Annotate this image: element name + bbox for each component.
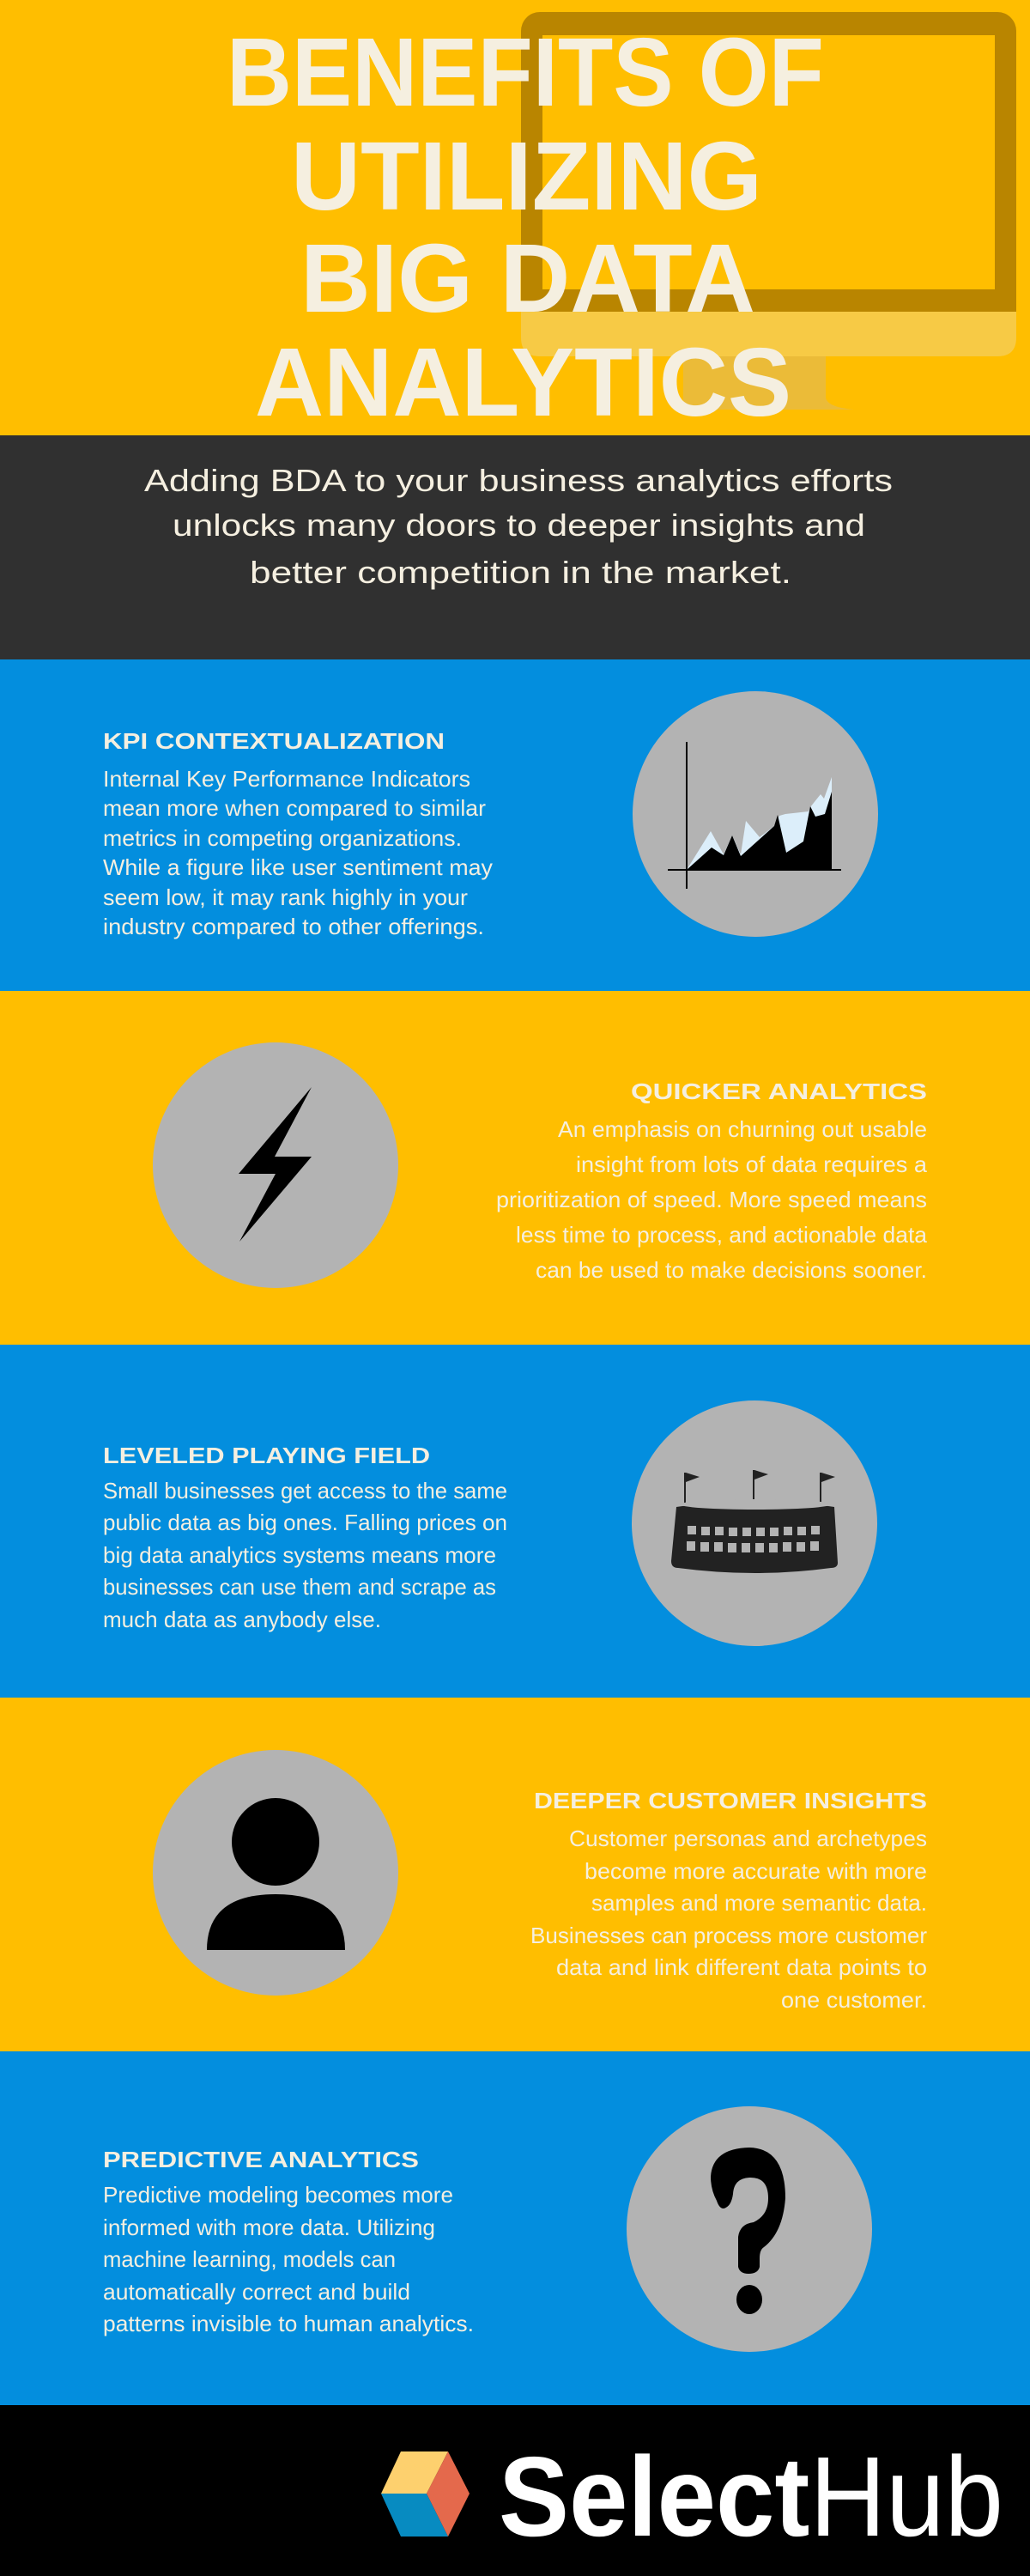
text block: KPI: While a figure like user sentiment may bbox=[103, 854, 493, 880]
panel: predictive analytics bbox=[0, 2051, 1030, 2405]
text block: KPI: industry compared to other offerings. bbox=[103, 914, 484, 939]
text block: quicker: An emphasis on churning out usable bbox=[558, 1116, 927, 1142]
heading: predictive: PREDICTIVE ANALYTICS bbox=[103, 2147, 419, 2172]
text block: quicker: less time to process, and actionable data bbox=[516, 1222, 928, 1248]
text block: quicker: can be used to make decisions sooner. bbox=[536, 1257, 927, 1283]
text block: deeper: one customer. bbox=[781, 1987, 927, 2013]
text block: leveled: big data analytics systems means more bbox=[103, 1542, 496, 1568]
text block: deeper: data and link different data points to bbox=[556, 1954, 927, 1980]
text block: KPI: seem low, it may rank highly in your bbox=[103, 884, 468, 910]
intro band bbox=[0, 435, 1030, 659]
title: UTILIZING bbox=[291, 122, 762, 230]
icon: chart bbox=[633, 691, 878, 937]
text block: quicker bbox=[496, 1116, 928, 1283]
text block: KPI: metrics in competing organizations. bbox=[103, 825, 462, 851]
footer bbox=[0, 2405, 1030, 2576]
text block: KPI: Internal Key Performance Indicators bbox=[103, 766, 470, 792]
text block: predictive: patterns invisible to human analytics. bbox=[103, 2311, 474, 2336]
text block: predictive: machine learning, models can bbox=[103, 2246, 396, 2272]
header band bbox=[0, 0, 1030, 436]
text block: deeper: become more accurate with more bbox=[585, 1858, 927, 1884]
icon: person bbox=[153, 1750, 398, 1996]
text block: predictive: informed with more data. Utilizing bbox=[103, 2215, 435, 2240]
heading: quicker: QUICKER ANALYTICS bbox=[631, 1078, 927, 1104]
text block: leveled: Small businesses get access to the same bbox=[103, 1478, 507, 1504]
text block: predictive: automatically correct and build bbox=[103, 2279, 410, 2305]
panel: deeper customer insights bbox=[0, 1698, 1030, 2051]
intro text: Adding BDA to your business analytics efforts bbox=[144, 463, 893, 498]
text block: quicker: insight from lots of data requires a bbox=[576, 1151, 928, 1177]
text block: KPI: mean more when compared to similar bbox=[103, 795, 486, 821]
icon: lightning bbox=[153, 1042, 398, 1288]
text block: deeper bbox=[530, 1826, 927, 2013]
text block: leveled: businesses can use them and scrape as bbox=[103, 1574, 496, 1600]
heading: leveled: LEVELED PLAYING FIELD bbox=[103, 1443, 430, 1468]
title: BIG DATA bbox=[300, 224, 755, 332]
icon: question mark bbox=[627, 2106, 872, 2352]
text block: leveled bbox=[103, 1478, 507, 1632]
text block: KPI bbox=[103, 766, 493, 939]
text block: leveled: much data as anybody else. bbox=[103, 1607, 381, 1632]
heading: KPI: KPI CONTEXTUALIZATION bbox=[103, 728, 445, 754]
text block: deeper: Customer personas and archetypes bbox=[569, 1826, 927, 1851]
title: BENEFITS OF bbox=[227, 18, 824, 126]
title bbox=[227, 18, 824, 436]
icon: monitor bbox=[521, 12, 1016, 410]
panel: KPI contextualization bbox=[0, 659, 1030, 991]
panel: quicker analytics bbox=[0, 991, 1030, 1345]
intro text: unlocks many doors to deeper insights and bbox=[173, 507, 865, 543]
intro text bbox=[144, 463, 893, 590]
panel: leveled playing field bbox=[0, 1345, 1030, 1698]
text block: predictive bbox=[103, 2182, 474, 2336]
text block: leveled: public data as big ones. Falling prices on bbox=[103, 1510, 507, 1535]
text block: deeper: Businesses can process more customer bbox=[530, 1923, 927, 1948]
logo mark bbox=[381, 2451, 470, 2537]
logo text: SelectHub bbox=[499, 2433, 1003, 2560]
title: ANALYTICS bbox=[255, 328, 791, 436]
intro text: better competition in the market. bbox=[250, 555, 791, 590]
heading: deeper: DEEPER CUSTOMER INSIGHTS bbox=[534, 1788, 927, 1814]
text block: predictive: Predictive modeling becomes more bbox=[103, 2182, 453, 2208]
icon: stadium bbox=[632, 1400, 877, 1646]
text block: deeper: samples and more semantic data. bbox=[591, 1890, 927, 1916]
text block: quicker: prioritization of speed. More speed means bbox=[496, 1187, 927, 1212]
